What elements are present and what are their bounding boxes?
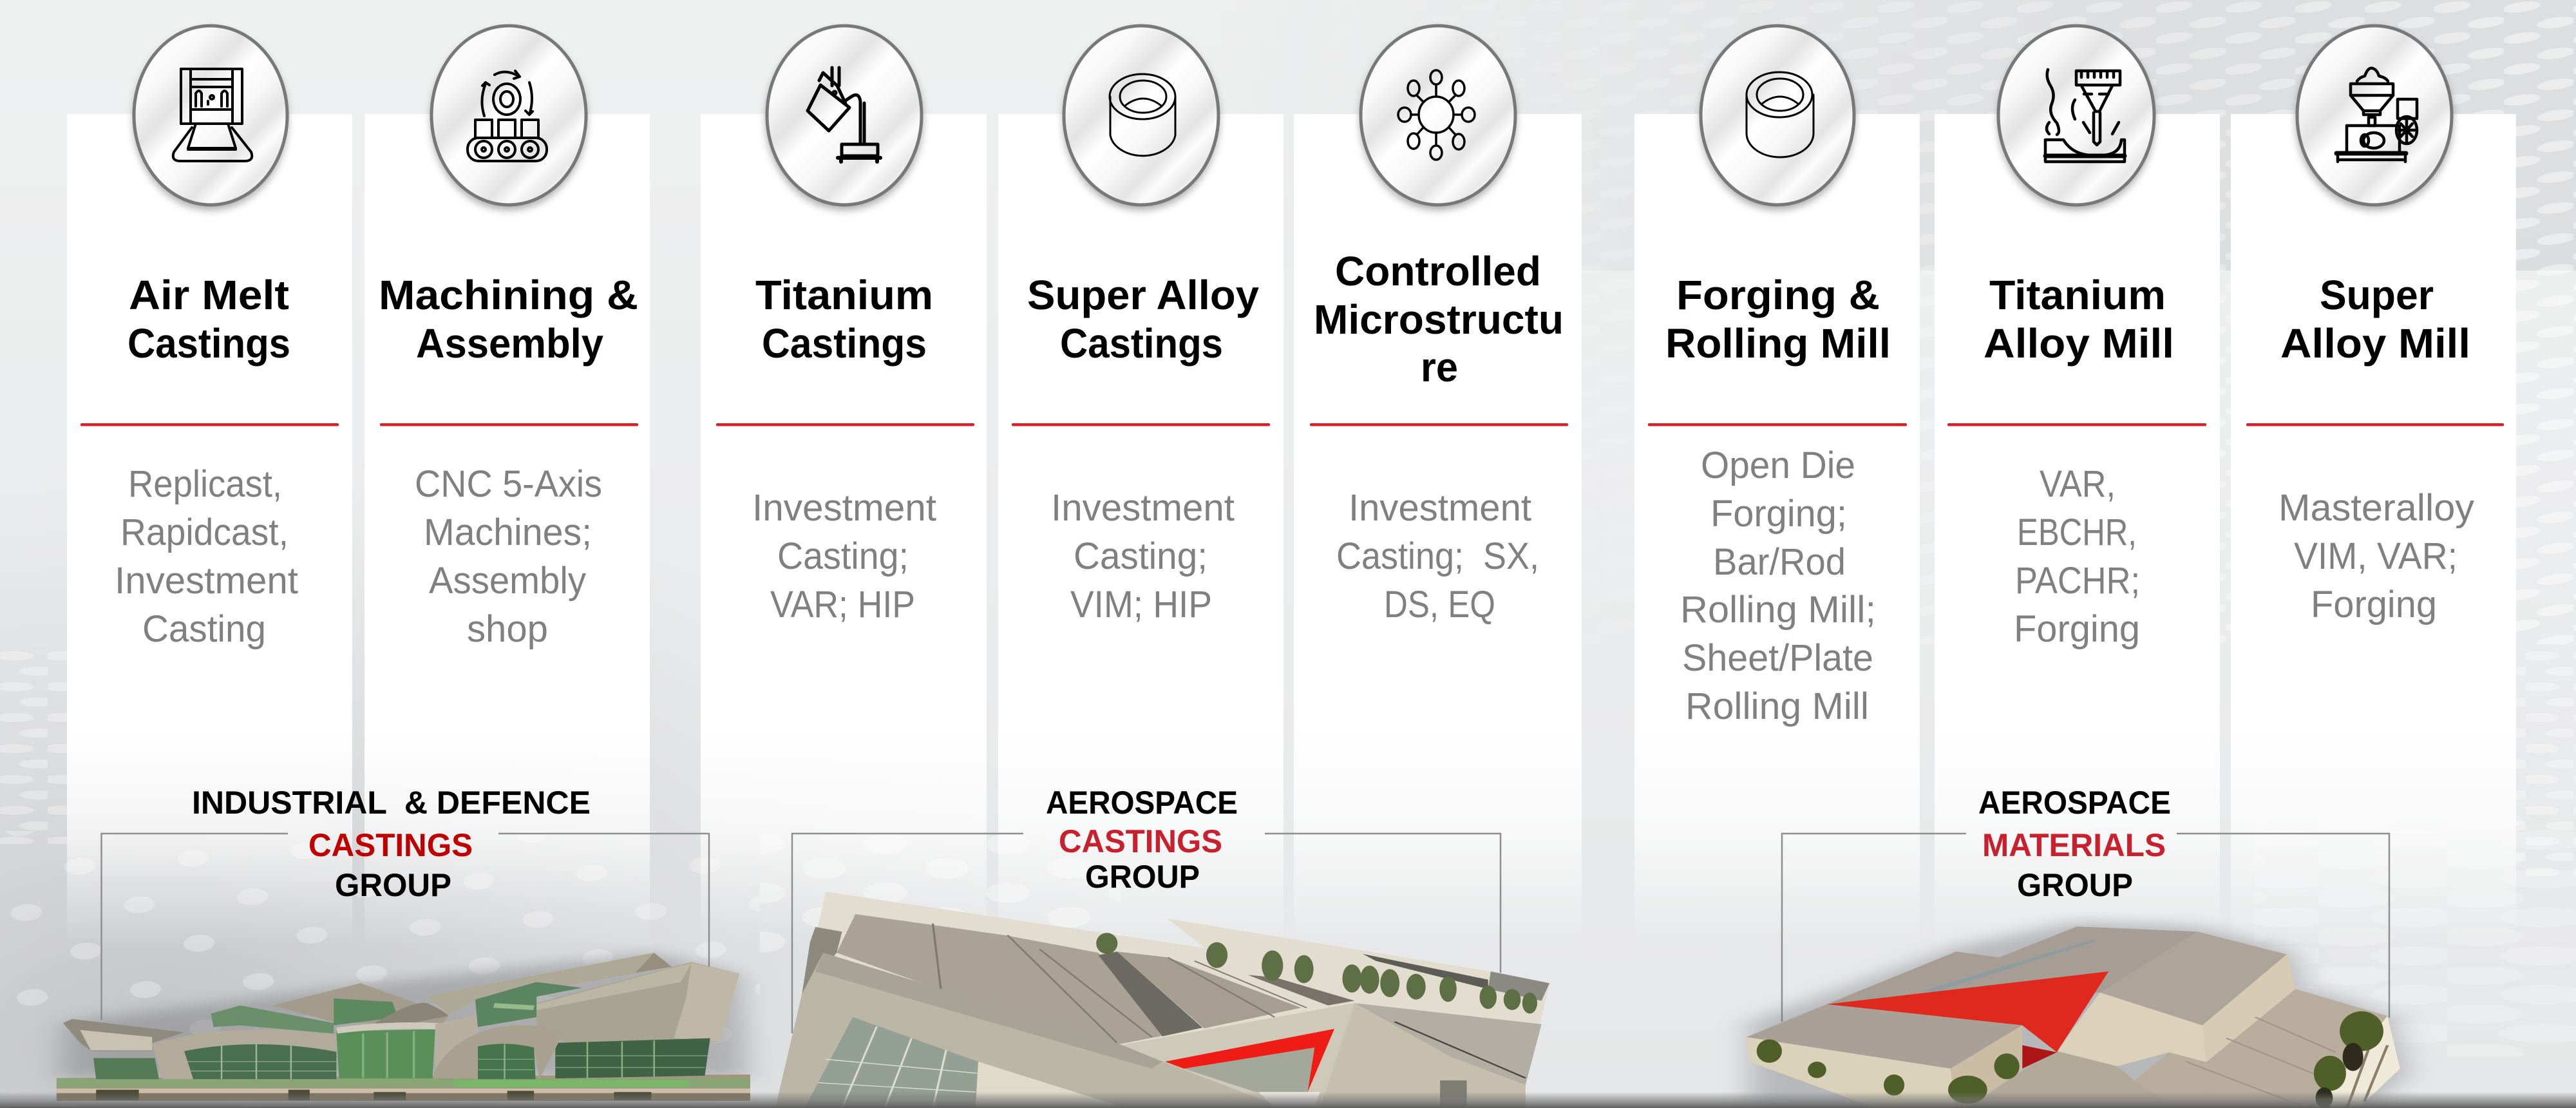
- frame: aerospace materials group: [1782, 834, 2389, 1022]
- description: Assembly: [429, 560, 586, 602]
- description: Open Die: [1701, 444, 1855, 486]
- icon: node network: [1398, 70, 1475, 160]
- title: [1027, 272, 1259, 367]
- trees: [1096, 933, 1537, 1013]
- panel: Forging & Rolling Mill: [1634, 26, 1920, 971]
- oval badge: ring: [1063, 26, 1219, 210]
- title: Controlled: [1335, 248, 1541, 294]
- oval badge: ring: [1700, 26, 1855, 210]
- big back roof: [427, 953, 672, 1015]
- description: [115, 463, 298, 650]
- heading: aerospace materials group: GROUP: [2017, 867, 2133, 903]
- description: [2014, 463, 2140, 650]
- oval badge: CNC mill: [1998, 26, 2155, 210]
- heading: industrial and defence castings group: [192, 785, 591, 903]
- panel: Titanium Castings: [701, 26, 987, 951]
- description: Casting;: [777, 535, 909, 577]
- description: EBCHR,: [2017, 511, 2137, 553]
- title: Assembly: [416, 320, 603, 367]
- heading: aerospace castings group: [1046, 785, 1238, 895]
- icon: ring cylinder: [1110, 74, 1175, 156]
- heading: industrial and defence castings group: GROUP: [335, 867, 451, 903]
- description: Bar/Rod: [1713, 541, 1846, 583]
- title: [1314, 248, 1564, 390]
- icon: hopper machine: [2336, 68, 2417, 162]
- description: Forging: [2311, 584, 2437, 626]
- palms: [1757, 1011, 2383, 1103]
- bottom shadow strip: [0, 1092, 2576, 1108]
- title: Air Melt: [129, 272, 289, 318]
- description: Replicast,: [128, 463, 282, 505]
- heading: aerospace castings group: CASTINGS: [1059, 823, 1222, 859]
- title: [1984, 272, 2174, 367]
- description: Casting: [142, 608, 266, 650]
- description: PACHR;: [2015, 560, 2140, 602]
- title: Titanium: [1989, 272, 2166, 318]
- description: Investment: [1051, 487, 1235, 529]
- panel: Machining & Assembly: [365, 26, 650, 951]
- panel: Super Alloy Mill: [2231, 26, 2516, 971]
- image: aerospace castings building: [775, 892, 1549, 1108]
- oval badge: ladle: [766, 26, 923, 210]
- title: re: [1421, 344, 1458, 390]
- title: Castings: [1060, 320, 1223, 367]
- description: VIM, VAR;: [2294, 535, 2458, 577]
- title: [379, 272, 638, 367]
- title: Alloy Mill: [2280, 320, 2470, 367]
- heading: industrial and defence castings group: CASTINGS: [308, 827, 473, 863]
- frame: aerospace castings group: [792, 834, 1501, 1033]
- description: Forging;: [1710, 493, 1847, 535]
- title: Castings: [128, 320, 290, 367]
- oval badge: furnace: [133, 26, 288, 210]
- description: [415, 463, 602, 650]
- heading: industrial and defence castings group: INDUSTRIAL & DEFENCE: [192, 785, 591, 821]
- description: Casting; SX,: [1336, 535, 1539, 577]
- oval badge: network: [1360, 26, 1516, 210]
- panel: Air Melt Castings: [67, 26, 352, 951]
- image: aerospace materials building: [1747, 921, 2407, 1108]
- heading: aerospace castings group: AEROSPACE: [1046, 785, 1238, 821]
- oval badge: extruder machine: [2296, 26, 2453, 210]
- description: CNC 5-Axis: [415, 463, 602, 505]
- icon: CNC milling: [2045, 70, 2125, 162]
- description: [1051, 487, 1235, 626]
- title: [2280, 272, 2470, 367]
- panel: Titanium Alloy Mill: [1935, 26, 2220, 971]
- description: [1680, 444, 1876, 727]
- title: Super: [2320, 272, 2434, 318]
- heading: aerospace materials group: [1978, 785, 2171, 903]
- description: VAR; HIP: [770, 584, 915, 626]
- title: [128, 272, 290, 367]
- description: Investment: [752, 487, 936, 529]
- title: Castings: [762, 320, 927, 367]
- icon: furnace: [173, 69, 252, 161]
- icon: pouring ladle: [808, 68, 880, 162]
- description: Machines;: [424, 511, 592, 553]
- oval badge: conveyor: [431, 26, 587, 210]
- image: industrial and defence building: [57, 953, 750, 1101]
- icon: conveyor with gear: [468, 71, 547, 161]
- panel: Controlled Microstructure: [1294, 26, 1582, 951]
- description: Sheet/Plate: [1682, 637, 1873, 679]
- description: VAR,: [2040, 463, 2116, 505]
- description: Rolling Mill: [1685, 685, 1869, 727]
- title: Microstructu: [1314, 296, 1564, 343]
- description: Rolling Mill;: [1680, 589, 1876, 631]
- title: Forging &: [1676, 272, 1880, 318]
- description: [2278, 487, 2474, 626]
- description: [752, 487, 936, 626]
- title: Titanium: [755, 272, 933, 318]
- heading: aerospace castings group: GROUP: [1085, 859, 1200, 895]
- description: Investment: [115, 560, 298, 602]
- title: Machining &: [379, 272, 638, 318]
- panel: Super Alloy Castings: [998, 26, 1283, 951]
- title: Alloy Mill: [1984, 320, 2174, 367]
- description: [1336, 487, 1539, 626]
- frame: industrial and defence group: [102, 834, 709, 1020]
- description: Casting;: [1074, 535, 1208, 577]
- description: DS, EQ: [1384, 584, 1495, 626]
- description: Investment: [1349, 487, 1531, 529]
- heading: aerospace materials group: MATERIALS: [1982, 827, 2166, 863]
- description: VIM; HIP: [1070, 584, 1212, 626]
- title: Rolling Mill: [1665, 320, 1891, 367]
- heading: aerospace materials group: AEROSPACE: [1978, 785, 2171, 821]
- icon: ring cylinder: [1747, 72, 1814, 157]
- description: Masteralloy: [2278, 487, 2474, 529]
- title: [755, 272, 933, 367]
- description: shop: [467, 608, 548, 650]
- description: Rapidcast,: [120, 511, 289, 553]
- title: [1665, 272, 1891, 367]
- title: Super Alloy: [1027, 272, 1259, 318]
- description: Forging: [2014, 608, 2140, 650]
